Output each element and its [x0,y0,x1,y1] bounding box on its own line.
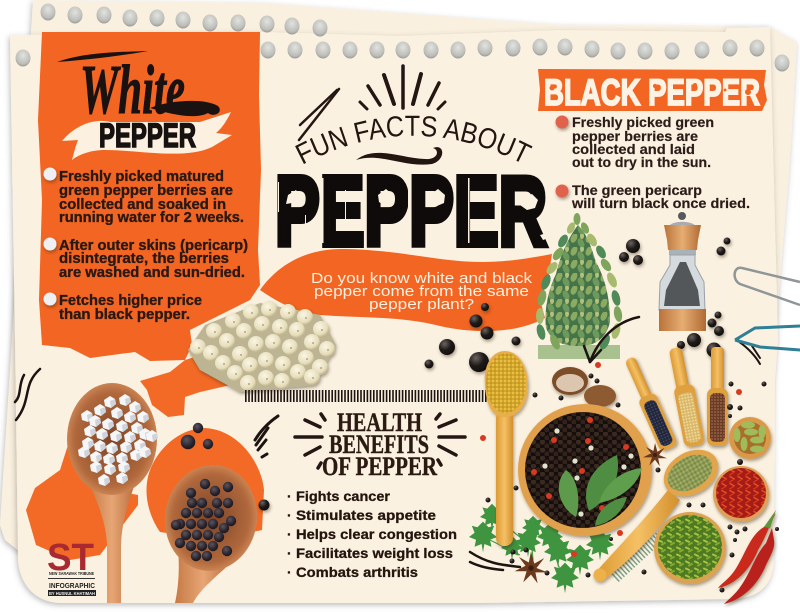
text: ribbon question: pepper come from the same [314,283,529,300]
text: white pepper facts: running water for 2 weeks. [59,210,244,226]
black peppercorns [171,479,236,561]
orange ribbon [260,249,552,331]
heading: health benefits: HEALTH [337,408,422,437]
icon: green herb bowl [654,512,726,584]
text: white pepper facts: than black pepper. [59,307,190,323]
list: health benefits: · [287,488,292,504]
main title: PEPPER [275,156,549,266]
ribbon banner [62,112,232,160]
list: health benefits: · [287,564,292,580]
icon: wooden spoon with white pepper [67,383,158,603]
text: ribbon question: Do you know white and black [311,270,533,287]
decorative strokes: left and blob [15,369,278,457]
logo: ST: BY HUSNUL KHATIMAH [49,591,95,596]
text: black pepper facts: collected and laid [572,141,695,157]
text: black pepper facts: The green pericarp [572,182,702,198]
swash line [57,51,148,62]
list: health benefits: Combats arthritis [296,564,418,580]
text: ribbon question [311,270,533,313]
white pepper bullets [44,168,56,306]
list: health benefits: · [287,545,292,561]
icon: yellow spoon [485,351,528,546]
text: white pepper facts: disintegrate, the berries [59,251,229,267]
list: health benefits: Helps clear congestion [296,526,457,542]
icon: parsley [469,504,614,593]
logo: ST: ST [47,537,94,579]
bay leaves [559,470,578,517]
banner word: PEPPER [99,117,196,155]
icon: pepper mill [659,212,706,331]
swash tail [150,101,220,116]
text: white pepper facts [59,169,248,323]
text: white pepper facts: Freshly picked matured [59,169,224,185]
flourish [356,147,442,165]
hatch divider [245,390,490,402]
rays [295,414,465,468]
black pepper bullets [556,116,568,198]
icon: grey paper clip [735,268,800,305]
icon: rosemary sprig [615,532,665,578]
text: black pepper facts [571,114,750,211]
panel: white pepper orange background [38,32,261,361]
icon: pepper plant [535,213,623,359]
icon: nutmeg [552,367,616,407]
icon: green spoon [594,440,727,582]
text: ribbon question: pepper plant? [369,296,474,313]
icon: scoop with pale seeds [666,346,705,448]
scattered peppercorns and berries [480,362,779,592]
text: black pepper facts: pepper berries are [572,128,698,144]
text: white pepper facts: collected and soaked in [59,197,226,213]
heading: fun facts about: FUN FACTS ABOUT [295,116,532,164]
icon: scoop with blue seeds [621,354,678,453]
text: white pepper facts: After outer skins (pericarp) [59,238,248,254]
icon: big bowl of peppercorns [518,404,652,536]
red and white peppercorns [531,417,629,511]
distress marks [550,83,751,100]
text: black pepper facts: Freshly picked green [572,114,714,130]
text: black pepper facts: out to dry in the sun. [572,154,711,170]
icon: white peppercorn pile [188,301,336,392]
icon: wooden spoon with black pepper [158,459,264,603]
orange blob: circle [146,428,264,540]
icon: saffron bowl [713,466,769,522]
arrow: points from plant to spices [584,317,639,362]
list: health benefits: Stimulates appetite [296,507,436,523]
list: health benefits: Facilitates weight loss [296,545,453,561]
text: black pepper facts: will turn black once dried. [571,195,750,211]
heading: health benefits: OF PEPPER [322,452,437,481]
heading: health benefits: BENEFITS [329,430,429,459]
icon: cardamom bowl [729,417,771,459]
script word: White [80,52,185,129]
logo: ST: INFOGRAPHIC [49,581,96,590]
logo: ST: NEW SARAWAK TRIBUNE [49,571,94,576]
edge leaves [535,213,623,351]
decorative rays above title [299,66,445,140]
list: health benefits: · [287,526,292,542]
icon: chillies [718,510,776,604]
peppercorns near mill and ribbon [258,238,730,510]
heading: health benefits [295,408,465,481]
text: white pepper facts: Fetches higher price [59,293,202,309]
loose black peppercorns [181,423,213,449]
star anise [514,443,667,583]
decorative strokes: right and bottom [470,340,760,570]
list: health benefits: Fights cancer [296,488,391,504]
crystals [78,394,158,486]
list: health benefits: · [287,507,292,523]
icon: blue paper clip [735,326,800,350]
list: health benefits [287,488,457,580]
binder holes [16,4,790,72]
distress marks [278,178,549,243]
icon: scoop with brown seeds [707,347,728,446]
main title: PEPPER: PEPPER [275,156,547,266]
orange blob: centre [140,356,235,417]
text: white pepper facts: green pepper berries are [59,183,233,199]
text: white pepper facts: are washed and sun-dried. [59,265,245,281]
orange blob: left [26,445,138,560]
heading: White Pepper [57,51,232,160]
